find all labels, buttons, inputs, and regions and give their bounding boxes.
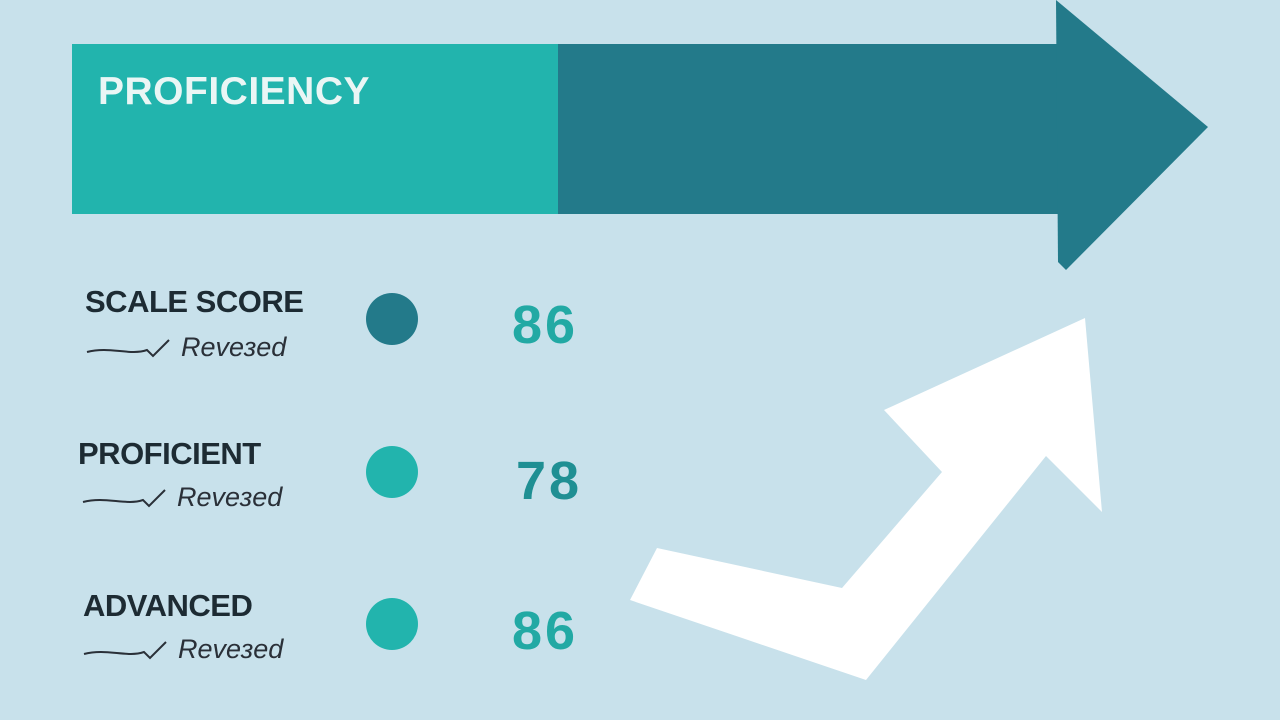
row 1: scale score: Revезed — [181, 332, 286, 362]
row 3: advanced: 86 — [512, 601, 578, 661]
row 3: advanced: Revезed — [178, 634, 283, 664]
row 2: proficient: Revезed — [177, 482, 282, 512]
row 3: advanced — [83, 588, 578, 664]
banner title: PROFICIENCY — [98, 70, 370, 113]
row 1: scale score — [85, 284, 578, 362]
row 3: advanced: ADVANCED — [83, 588, 252, 623]
row 2: proficient: 78 — [516, 451, 582, 511]
row 2: proficient: PROFICIENT — [78, 436, 261, 471]
row 1: scale score: 86 — [512, 295, 578, 355]
row 1: scale score: SCALE SCORE — [85, 284, 303, 319]
row 2: proficient — [78, 436, 582, 512]
